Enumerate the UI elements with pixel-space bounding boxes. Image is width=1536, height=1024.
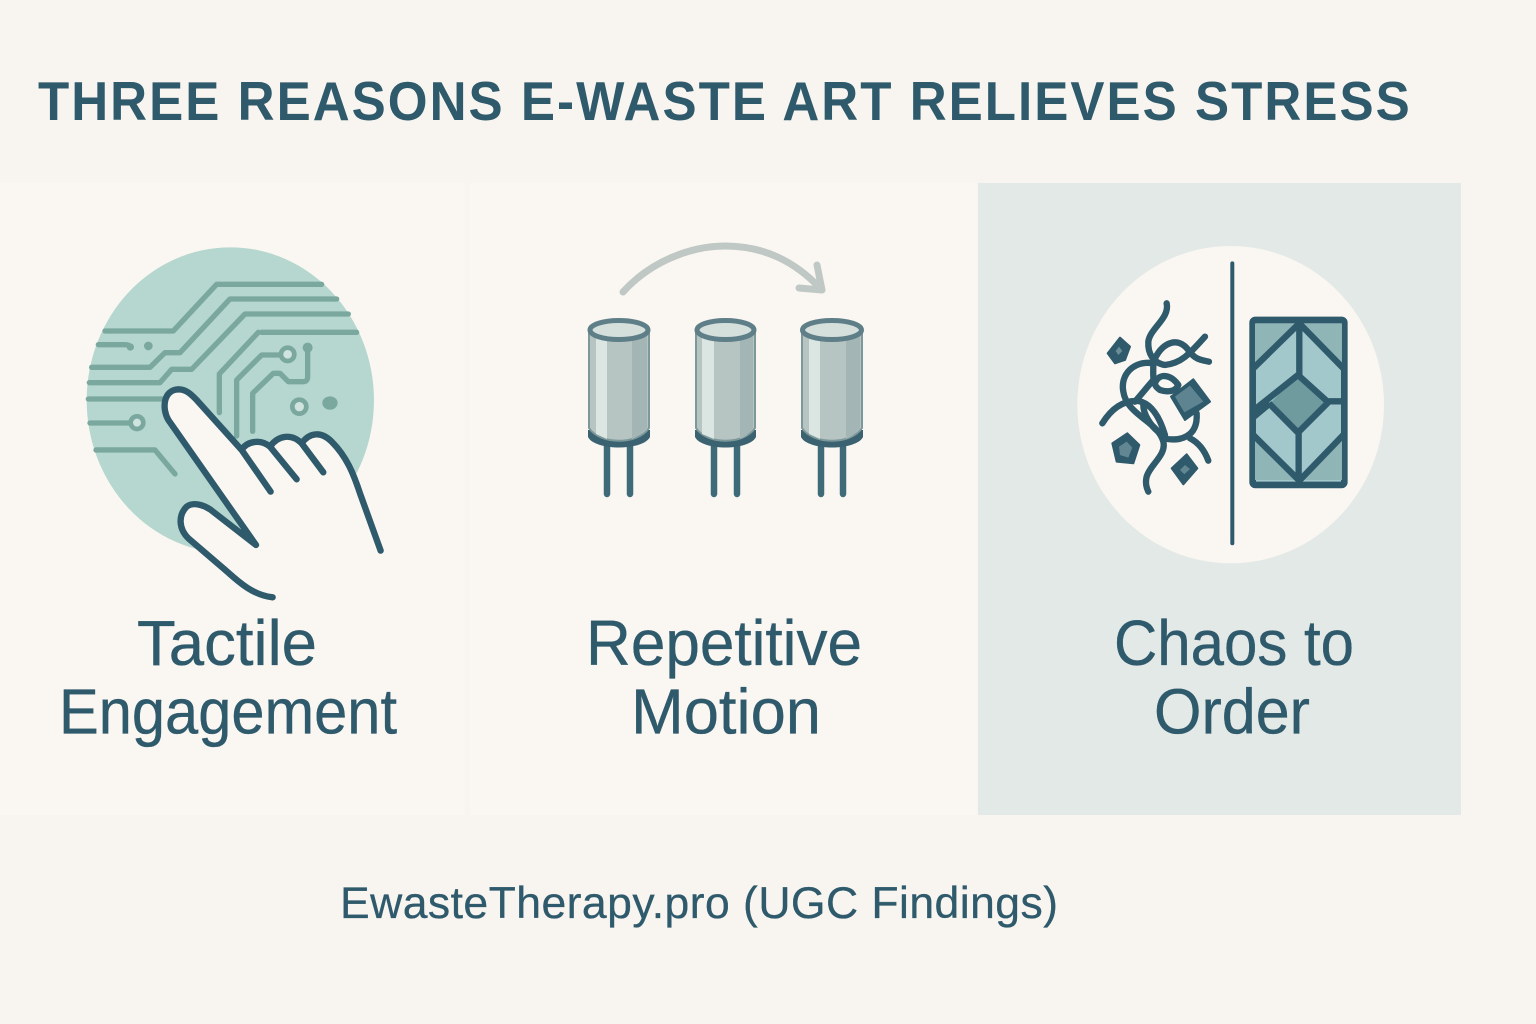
panel: chaos to order (978, 183, 1461, 815)
label: engagement: Engagement (59, 676, 397, 748)
panel: repetitive motion (470, 183, 977, 815)
icon: capacitor 3 (801, 320, 863, 494)
circuit pads (127, 342, 338, 410)
label: repetitive: Repetitive (586, 607, 862, 679)
panel: tactile engagement (0, 183, 465, 815)
icon: hand touching circuit board (87, 247, 381, 613)
disc (1077, 246, 1384, 563)
hand fill (165, 389, 381, 613)
hand outline (165, 389, 381, 597)
icon: capacitor 2 (695, 320, 756, 494)
source line: EwasteTherapy.pro (UGC Findings) (340, 879, 1058, 928)
arrow: motion arc (623, 246, 822, 292)
icon: chaos to order (1077, 246, 1384, 563)
title: THREE REASONS E-WASTE ART RELIEVES STRESS (38, 71, 1410, 132)
divider (1226, 263, 1238, 543)
circuit traces (88, 284, 357, 474)
stained glass panel (1253, 320, 1344, 485)
label: order: Order (1154, 676, 1310, 748)
icon: capacitor 1 (588, 320, 650, 494)
tangled wires and scrap chips (1102, 303, 1210, 492)
label: chaos to: Chaos to (1114, 607, 1354, 679)
label: tactile: Tactile (137, 607, 317, 679)
circuit disc (87, 247, 374, 553)
label: motion: Motion (631, 676, 821, 748)
